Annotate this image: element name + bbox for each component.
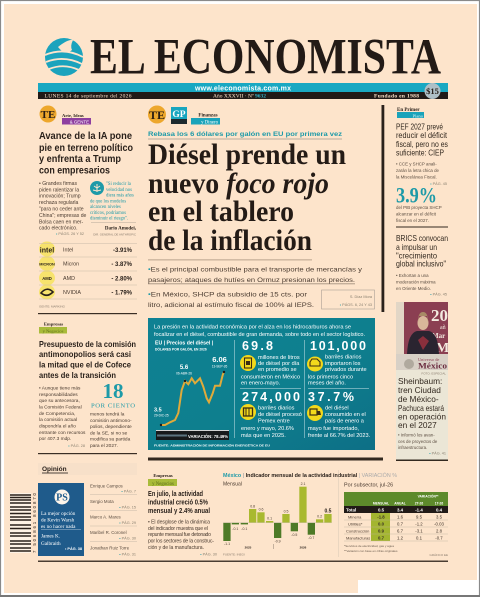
stat: 69.8 xyxy=(240,339,300,386)
stat: 101,000: importaron los xyxy=(325,361,361,367)
stat: 37.7%: frente al 66.7% del 2023. xyxy=(308,433,371,439)
section tag: Plano xyxy=(413,113,424,118)
table: industrial activity by subsector: 1.6 xyxy=(397,514,404,519)
stat: 37.7% xyxy=(307,390,371,439)
chart header: México | Indicador mensual de la actividad industrial | VARIACIÓN % xyxy=(223,472,397,479)
main story text xyxy=(148,266,363,309)
callout: 18 por ciento xyxy=(90,379,135,449)
quote: Dario Amodei: velocidad nos xyxy=(106,188,132,193)
story: BRICS: "crecimiento xyxy=(396,250,437,260)
story text: piden ralentizar la xyxy=(39,188,79,194)
table: industrial activity by subsector: -1.4 xyxy=(415,508,423,512)
story text: ces de proyectos de xyxy=(398,439,438,444)
table: industrial activity by subsector: VARIACIÓN** xyxy=(418,494,439,498)
story text: por los sectores de la construc- xyxy=(148,538,214,544)
table: industrial activity by subsector: 0.5 xyxy=(378,508,385,512)
story text: que su antecesora, xyxy=(39,398,80,404)
callout: 18 por ciento: 18 xyxy=(102,379,124,403)
callout: 18 por ciento: para el 2027. xyxy=(90,443,118,449)
quote: Dario Amodei: "Si reducir la xyxy=(106,182,132,187)
table: industrial activity by subsector: Minería xyxy=(348,514,362,519)
headline: tren Ciudad xyxy=(398,385,441,395)
heading: Opinión xyxy=(42,466,67,473)
stat: 101,000: barriles diarios xyxy=(325,354,362,360)
table: industrial activity by subsector: 2.8 xyxy=(436,528,443,533)
story: PEF 2027: PEF 2027 prevé xyxy=(396,122,443,132)
panel: actividad industrial story xyxy=(148,473,217,556)
story text: la comisión actual xyxy=(39,417,77,423)
story: BRICS: BRICS convocan xyxy=(396,233,448,243)
date band: www.eleconomista.com.mx xyxy=(194,86,291,92)
section tag: En Primer xyxy=(397,108,420,113)
table: industrial activity by subsector: -3.1 xyxy=(415,528,423,533)
table: technology stocks: intel xyxy=(40,248,54,254)
headline: en operación xyxy=(398,412,446,422)
story text: rechaza regularla xyxy=(39,200,79,206)
featured column: Galbraith xyxy=(41,541,61,547)
main story text: pasajeros; ataques de hutíes en Ormuz presionan los precios. xyxy=(148,277,355,284)
story: BRICS xyxy=(396,233,448,296)
stat: 274,000: barriles diarios xyxy=(258,406,295,412)
headline: Pachuca estará xyxy=(398,403,444,413)
section tag xyxy=(397,108,424,118)
stat: 69.8: en promedio se xyxy=(258,367,297,373)
stat: 274,000: de diésel procesó xyxy=(258,412,302,418)
main headline: de la inflación xyxy=(148,224,312,257)
callout: 18 por ciento: modifica su partida xyxy=(90,436,131,442)
column list: Jonathan Ruiz Torre xyxy=(90,546,130,550)
table: industrial activity by subsector: 0.1 xyxy=(416,535,423,540)
quote: Dario Amodei: alcancen niveles xyxy=(90,205,121,210)
table: industrial activity by subsector: 0.7 xyxy=(378,535,385,540)
panel: Sheinbaum story xyxy=(396,302,449,461)
headline xyxy=(39,130,133,176)
headline: industrial creció 0.5% xyxy=(148,498,208,506)
stat: 101,000: privados durante xyxy=(325,367,367,373)
date band: Año XXXVII · Nº 9632 xyxy=(213,94,266,100)
story text: • PÁG. 28 xyxy=(68,444,85,448)
stat: 274,000: enero y mayo, 20.6% xyxy=(241,426,294,432)
story text: ción y de la manufactura. xyxy=(148,545,204,551)
table: industrial activity by subsector: ANUAL xyxy=(394,501,406,505)
story: BRICS: a impulsar un xyxy=(396,242,437,252)
column list: Marco A. Mares xyxy=(90,514,122,520)
section tag: Arte, Ideas & Gente: TE xyxy=(41,109,55,121)
table: industrial activity by subsector: 9.5 xyxy=(416,514,423,519)
column list: • PÁG. 30 xyxy=(119,536,136,540)
bar chart: monthly industrial activity: 0.5 xyxy=(284,510,288,514)
line chart: diesel price: FUENTE: ADMINISTRACIÓN DE INFORMACIÓN ENERGÉTICA DE EU xyxy=(154,442,270,448)
story: PEF 2027: • CCE y SHCP anali- xyxy=(396,162,437,166)
callout: 3.9%: alcanzar en el déficit xyxy=(396,212,437,216)
table: technology stocks: NVIDIA xyxy=(63,290,81,296)
panel: comisión antimonopolios story xyxy=(39,322,136,449)
table: technology stocks: - 1.79% xyxy=(111,290,133,296)
section tag: Empresas xyxy=(39,322,67,334)
story text: la Comisión Federal xyxy=(39,404,82,410)
main headline xyxy=(148,138,346,257)
photo: Sheinbaum at podium: M xyxy=(436,341,449,356)
stat: 274,000: 274,000 xyxy=(242,390,300,404)
table: industrial activity by subsector: -1.2 xyxy=(415,521,423,526)
line chart: diesel price: EU | Precios del diésel | xyxy=(155,340,214,346)
photo: Sheinbaum at podium: añ xyxy=(440,325,446,331)
bar chart: monthly industrial activity: -0.1 xyxy=(232,527,238,531)
line chart: diesel price: 29-DIC-25 xyxy=(154,414,169,418)
stat: 101,000 xyxy=(307,339,367,386)
stat: 101,000: 101,000 xyxy=(310,339,366,353)
table: industrial activity by subsector: 3.4 xyxy=(397,508,404,512)
line chart: diesel price xyxy=(154,340,270,448)
table: industrial activity by subsector: 6.7 xyxy=(397,528,404,533)
section tag xyxy=(148,473,177,487)
masthead logo: globe xyxy=(45,38,83,76)
column list: Enrique Campos xyxy=(90,484,124,488)
line chart: diesel price: 3.5 xyxy=(154,408,162,414)
stat: 69.8: en enero-mayo. xyxy=(241,380,281,386)
column list: • PÁG. 29 xyxy=(119,521,136,525)
bar chart: monthly industrial activity: -0.5 xyxy=(291,533,297,537)
section tag: Empresas xyxy=(153,473,173,478)
story: PEF 2027: fiscal, pero no es xyxy=(396,139,448,149)
barcode: 7 506861 860870 xyxy=(32,492,37,553)
table: technology stocks: - 2.80% xyxy=(111,276,133,282)
stat: 69.8: millones de litros xyxy=(258,355,300,361)
section tags: Finanzas y Dinero: y Dinero xyxy=(201,120,219,125)
main headline: en el tablero xyxy=(148,195,294,228)
table: industrial activity by subsector xyxy=(344,482,448,557)
headline: y enfrenta a Trump xyxy=(39,153,121,165)
table: industrial activity by subsector: 0.9 xyxy=(378,528,385,533)
story: BRICS: global inclusivo" xyxy=(396,258,446,268)
stat: 37.7%: país de enero a xyxy=(325,418,365,424)
headline: Sheinbaum: xyxy=(398,376,442,386)
main headline: Diésel prende un xyxy=(148,138,346,171)
story: PEF 2027 xyxy=(396,122,448,186)
story: PEF 2027: suficiente: CIEP xyxy=(396,147,444,157)
table: industrial activity by subsector: **Variación con base en cifras originales xyxy=(344,549,398,553)
story: PEF 2027: zarán la letra chica de xyxy=(396,168,440,173)
quote: Dario Amodei: DIR. GENERAL DE ANTHROPIC xyxy=(93,232,136,236)
line chart: diesel price: 13-SEP-26 xyxy=(212,364,228,368)
bar chart: monthly industrial activity: -0.1 xyxy=(241,527,247,531)
table: technology stocks: MICRON xyxy=(39,262,55,266)
stat: 101,000: meses del año. xyxy=(308,380,346,386)
featured column: de Kevin Warsh xyxy=(41,518,75,524)
story text: infraestructura. xyxy=(398,445,427,450)
main story text: litro, adicional al estímulo fiscal de 100% al IEPS. xyxy=(148,302,314,309)
bar chart: monthly industrial activity: 2.1 xyxy=(301,482,305,486)
bar chart: monthly industrial activity: 2025 xyxy=(245,546,252,550)
table: technology stocks: AMD xyxy=(42,276,52,281)
bar chart: monthly industrial activity xyxy=(223,482,332,556)
story text: innovación; Trump xyxy=(39,194,81,200)
featured column: PS xyxy=(56,492,68,504)
story text: • PÁG. 41 xyxy=(429,452,446,456)
panel: Opinión xyxy=(10,463,137,556)
table: industrial activity by subsector: Manufacturas xyxy=(346,535,370,540)
table: industrial activity by subsector: Construcción xyxy=(346,528,369,533)
story text: • PÁG. 30 xyxy=(200,552,217,556)
story: PEF 2027: reducir el déficit xyxy=(396,130,448,140)
stat: 37.7%: mayo fue importado, xyxy=(308,426,359,432)
callout: 18 por ciento: polios, dependiente xyxy=(90,424,132,430)
story text: • Grandes firmas xyxy=(39,181,77,187)
section tags: Finanzas y Dinero: Finanzas xyxy=(198,114,218,118)
section tag: Arte, Ideas & Gente: & GENTE xyxy=(70,119,89,124)
table: technology stocks: -3.91% xyxy=(113,248,133,254)
stat: 37.7%: 37.7% xyxy=(308,390,354,404)
callout: 3.9%: fiscal en el 2027. xyxy=(396,218,429,223)
stat: 37.7%: del diésel xyxy=(325,406,349,412)
section tag: y Negocios xyxy=(152,482,174,487)
headline: pie en terreno político xyxy=(39,142,133,154)
table: industrial activity by subsector: 1.2 xyxy=(397,535,404,540)
callout: 3.9%: 3.9% xyxy=(396,182,437,208)
headline: antimonopolios será casi xyxy=(39,349,131,359)
intro text xyxy=(154,324,365,338)
story text: Bolsa caen en mer- xyxy=(39,220,83,226)
date band xyxy=(38,83,448,100)
table: industrial activity by subsector: -0.03 xyxy=(434,521,445,526)
headline: la mitad que el de Cofece xyxy=(39,360,131,370)
callout: 18 por ciento: POR CIENTO xyxy=(91,402,135,410)
featured column: La mejor opción xyxy=(41,511,76,517)
intro text: La presión en la actividad económica por el alza en los hidrocarburos ahora se xyxy=(154,324,351,330)
table: industrial activity by subsector: Utilities* xyxy=(348,521,363,526)
table: industrial activity by subsector: -0.7 xyxy=(435,535,443,540)
variation bar: VARIACIÓN: 78.49% xyxy=(188,432,229,440)
callout: 18 por ciento: comisión antimono- xyxy=(90,418,132,424)
bar chart: monthly industrial activity: -0.9 xyxy=(275,540,281,544)
column list: Sergio Mota xyxy=(90,499,114,504)
table: industrial activity by subsector: Total xyxy=(346,508,356,512)
column list xyxy=(90,484,137,556)
intro text: focalizar en el diésel, combustible de gran demanda, sobre todo en el sector logístico. xyxy=(154,332,365,338)
callout: 18 por ciento: de la SE, si no se xyxy=(90,430,128,436)
table: industrial activity by subsector: GRÁFICO EE xyxy=(429,553,448,557)
stat: 69.8: de diésel por día xyxy=(258,361,300,367)
table: industrial activity by subsector: 3.5 xyxy=(436,514,443,519)
bar chart: monthly industrial activity: -0.7 xyxy=(308,536,314,540)
bar chart: monthly industrial activity: FUENTE: INEGI xyxy=(223,552,245,556)
headline: con empresarios xyxy=(39,164,110,176)
bar chart: monthly industrial activity: -1.1 xyxy=(224,542,230,546)
headline: Avance de la IA pone xyxy=(39,130,132,142)
stat: 69.8: consumieron en México xyxy=(241,374,300,380)
table: technology stocks: Intel xyxy=(63,248,73,254)
byline box: S. Díaz Mora xyxy=(350,295,373,299)
table: industrial activity by subsector: MENSUAL xyxy=(373,501,389,505)
table: technology stocks: Micron xyxy=(63,262,79,268)
featured column: • PÁG. 38 xyxy=(65,546,82,551)
line chart: diesel price: 5.6 xyxy=(180,365,189,371)
callout: 18 por ciento: menos tendrá la xyxy=(90,412,125,418)
table: technology stocks: - 3.87% xyxy=(111,262,133,268)
story: BRICS: • Exhortan a una xyxy=(396,273,429,278)
section tag: Empresas: Empresas xyxy=(44,322,63,326)
table: industrial activity by subsector: 0.4 xyxy=(436,508,443,512)
section tag: Arte, Ideas & Gente: Arte, Ideas xyxy=(62,113,84,118)
photo: Sheinbaum at podium: Universo de xyxy=(418,357,439,362)
story text: "para no ceder ante xyxy=(39,206,84,212)
photo: Sheinbaum at podium xyxy=(396,302,449,376)
story text: dispondría el año xyxy=(39,424,76,430)
table: industrial activity by subsector: *Servicios de electricidad, gas y agua xyxy=(344,544,394,548)
byline box: • PÁGS. 6, 24 Y 43 xyxy=(340,303,372,307)
story text: • Aunque tiene más xyxy=(39,386,81,392)
table: industrial activity by subsector: 0.0 xyxy=(378,521,385,526)
stat: 274,000: más que en 2025. xyxy=(241,433,286,439)
story text: por 407.3 mdp. xyxy=(39,436,71,442)
featured column xyxy=(38,483,84,556)
photo: Sheinbaum at podium: FOTO: ESPECIAL xyxy=(421,372,446,376)
story text: China"; empresas de xyxy=(39,213,87,219)
callout: 3.9%: del PIB proyecta SHCP xyxy=(396,205,442,210)
date band: $15 xyxy=(426,86,439,96)
bar chart: monthly industrial activity: 0.8 xyxy=(250,504,255,508)
column list: • PÁG. 7 xyxy=(121,490,136,494)
section tags: Finanzas y Dinero: TE xyxy=(149,108,165,122)
section tags: Finanzas y Dinero: GP xyxy=(172,110,186,120)
story text: del indicador muestra que el xyxy=(148,526,208,532)
story: BRICS: moderación máxima xyxy=(396,280,436,284)
headline: En julio, la actividad xyxy=(148,489,203,498)
story text: • El desglose de la dinámica xyxy=(148,520,210,526)
story text: • PÁGS. 26 Y 52 xyxy=(56,232,84,236)
quote: Dario Amodei: diera más años xyxy=(106,194,134,198)
headline: Presupuesto de la comisión xyxy=(39,339,136,349)
bar chart: monthly industrial activity: 2026 xyxy=(300,546,307,550)
main story text: •En México, SHCP da subsidio de 15 cts. por xyxy=(148,292,307,298)
column list: • PÁG. 31 xyxy=(119,552,136,556)
section tag: Empresas: y Negocios xyxy=(43,328,64,334)
table: technology stocks xyxy=(39,242,137,308)
panel: En Primer Plano xyxy=(396,108,448,296)
story text xyxy=(398,432,446,456)
photo: Sheinbaum at podium: Mar xyxy=(432,332,445,340)
story: BRICS: • PÁG. 45 xyxy=(430,292,447,296)
story text: • Informó los avan- xyxy=(398,432,435,438)
section tag: Arte, Ideas & Gente xyxy=(40,106,91,124)
line chart: diesel price: 6.06 xyxy=(212,355,227,364)
stat: 37.7%: consumido en el xyxy=(325,412,366,418)
table: industrial activity by subsector: Por subsector, jul-26 xyxy=(344,482,393,488)
date band: LUNES 14 de septiembre del 2026 xyxy=(44,94,132,100)
story text: repunte mensual fue detonado xyxy=(148,532,211,538)
photo: Sheinbaum at podium: México xyxy=(418,362,447,370)
bar chart: monthly industrial activity: 0.6 xyxy=(259,508,263,512)
headline: antes de la transición xyxy=(39,370,116,380)
column list: Maribel R. Coronel xyxy=(90,530,127,535)
headline: de México- xyxy=(398,394,439,404)
story text: de Competencia, xyxy=(39,411,75,417)
table: industrial activity by subsector: 1T-26 xyxy=(435,501,443,505)
quote: Dario Amodei: críticos, podríamos xyxy=(90,211,126,216)
line chart: diesel price: DÓLARES POR GALÓN, EN 2026 xyxy=(155,346,207,351)
quote: Dario Amodei xyxy=(90,181,137,236)
headline xyxy=(148,489,210,515)
story: PEF 2027: la Miscelánea Fiscal. xyxy=(396,174,437,179)
bar chart: monthly industrial activity: 0.2 xyxy=(317,514,322,518)
date band: Fundado en 1988 xyxy=(374,94,419,100)
table: industrial activity by subsector: 2T-26 xyxy=(415,501,423,505)
quote: Dario Amodei: disminuir el riesgo". xyxy=(90,216,128,222)
featured column: James K. xyxy=(41,534,60,540)
kicker: Rebasa los 6 dólares por galón en EU por primera vez xyxy=(148,131,342,138)
stat: 101,000: los primeros cinco xyxy=(308,374,353,380)
story: BRICS: en Oriente Medio. xyxy=(396,286,431,291)
headline: en el 2027 xyxy=(398,420,437,430)
line chart: diesel price: 06-ABR-26 xyxy=(176,372,192,376)
table: industrial activity by subsector: -1.8 xyxy=(377,514,385,519)
table: technology stocks: AMD xyxy=(63,276,75,282)
headline: mensual y 2.4% anual xyxy=(148,506,210,515)
stat: 274,000 xyxy=(240,390,302,439)
main story text: •Es el principal combustible para el transporte de mercancías y xyxy=(148,266,363,274)
table: industrial activity by subsector: 0.7 xyxy=(397,521,404,526)
main headline: nuevo foco rojo xyxy=(148,167,329,200)
quote: Dario Amodei: de que los modelos xyxy=(90,200,126,204)
section tags: Finanzas y Dinero xyxy=(148,106,220,125)
story text xyxy=(148,520,217,556)
table: technology stocks: GENTE: MARKING xyxy=(39,304,66,308)
featured column: es no hacer nada xyxy=(41,524,76,530)
story: PEF 2027: • PÁG. 45 xyxy=(430,182,447,186)
column list: • PÁG. 15 xyxy=(119,506,136,510)
panel: IA and Trump story xyxy=(39,106,137,308)
panel: diesel data xyxy=(148,318,375,450)
stat: 274,000: Pemex entre xyxy=(258,418,290,424)
stat: 69.8: 69.8 xyxy=(242,339,273,353)
headline xyxy=(398,376,446,430)
bar chart: monthly industrial activity: 0.5 xyxy=(325,508,332,514)
byline box xyxy=(322,290,374,309)
story text: responsabilidades xyxy=(39,392,78,398)
story text xyxy=(39,386,86,448)
photo: Sheinbaum at podium: 20 xyxy=(431,306,448,325)
callout: 3.9% xyxy=(396,182,442,223)
headline xyxy=(39,339,136,380)
story text: entrante con recursos xyxy=(39,430,86,436)
story text xyxy=(39,181,87,236)
bar chart: monthly industrial activity: Mensual xyxy=(223,482,242,488)
quote: Dario Amodei: Dario Amodei, xyxy=(105,226,137,232)
story text: cado electrónico. xyxy=(39,226,78,232)
bar chart: monthly industrial activity: 0.1 xyxy=(267,516,272,520)
